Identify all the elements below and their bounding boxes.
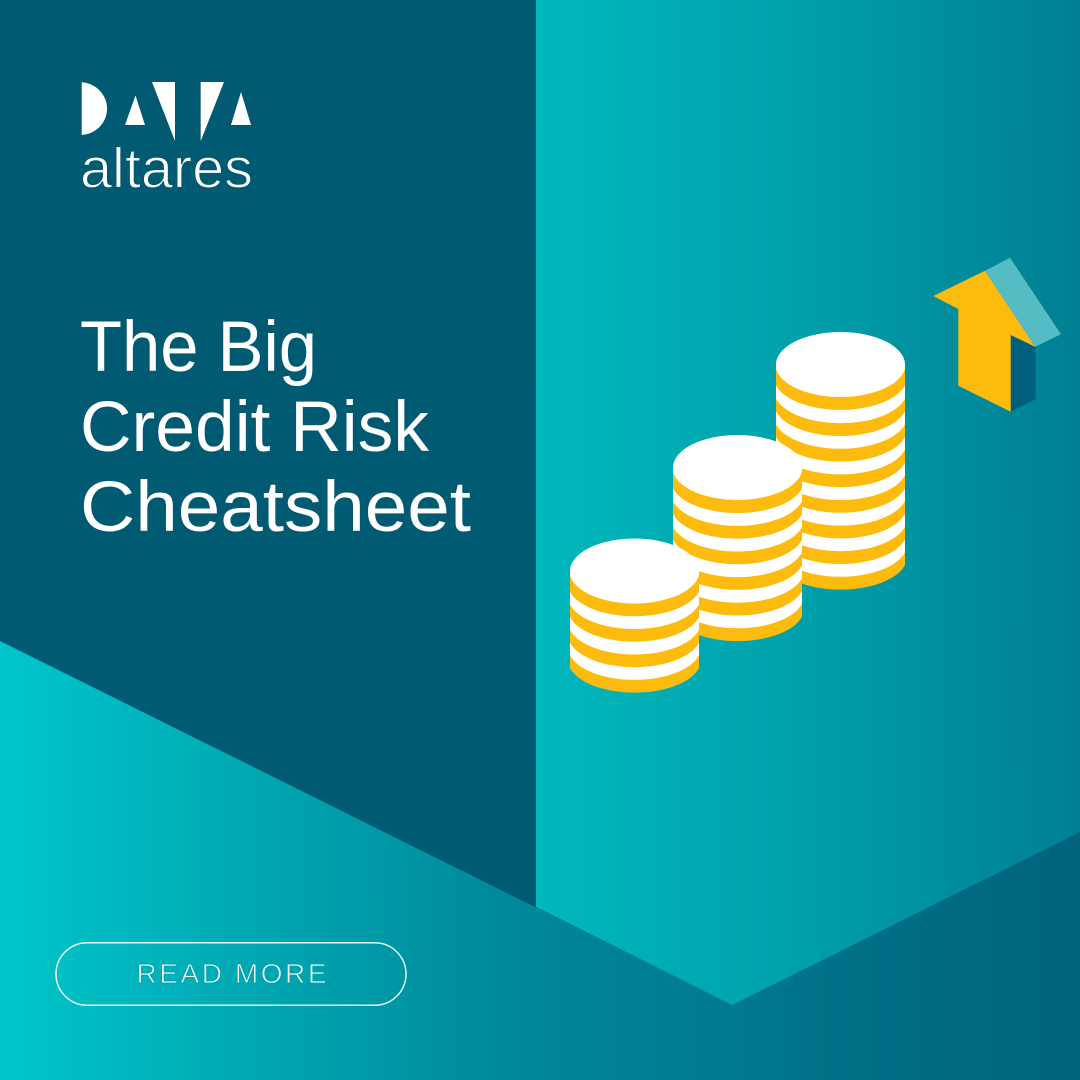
logo: DATA altares [80,82,253,200]
button: read more [56,943,406,1005]
icon: stack of coins, middle [673,435,802,641]
button outline [56,943,406,1005]
panel: right gradient panel [536,0,1080,1005]
logo: altares wordmark: altares [80,136,253,200]
panel: bottom gradient band [0,641,1080,1080]
icon: stack of coins, front [570,538,699,693]
logo: DATA wordmark [82,82,251,141]
icon: stack of coins, tall back [776,332,905,590]
panel: dark blue background [0,0,536,920]
arrow side face [1011,335,1036,412]
arrow top face [985,258,1061,347]
icon: isometric up arrow [933,258,1061,412]
arrow front face [933,271,1035,412]
title [80,307,471,547]
title line 3: Cheatsheet [80,467,471,547]
button label: READ MORE [136,958,326,989]
title line 2: Credit Risk [80,387,429,467]
title line 1: The Big [80,307,317,387]
